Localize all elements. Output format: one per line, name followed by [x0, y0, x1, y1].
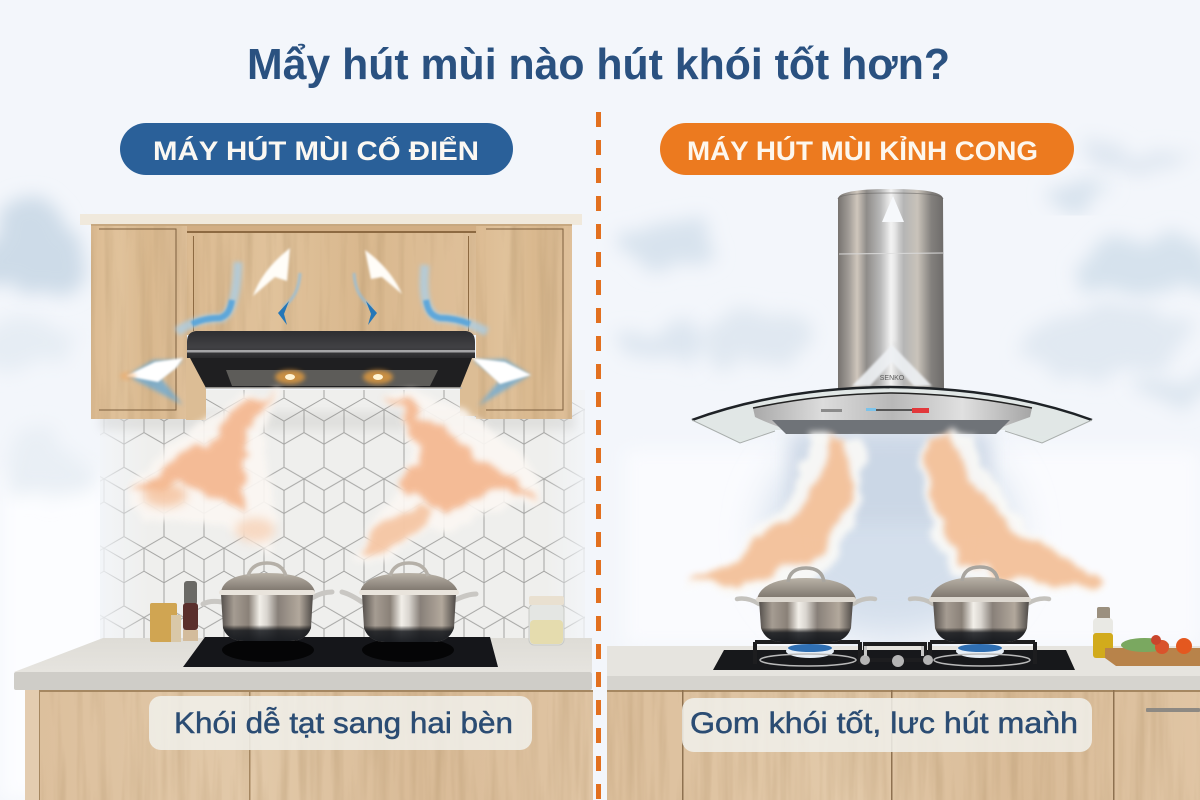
utensil block and bottle [150, 581, 198, 642]
airflow arrow in chimney [852, 196, 932, 386]
base cabinets [25, 690, 593, 800]
caption: curved glass hood [682, 698, 1092, 752]
caption: classic hood [149, 696, 532, 750]
panel: curved glass hood kitchen [607, 189, 1200, 800]
glass canopy [692, 387, 1092, 443]
spice jar [529, 596, 564, 645]
base cabinets [607, 690, 1200, 800]
stainless hood panel [753, 375, 1032, 434]
heading pill: curved glass hood [660, 123, 1074, 175]
panel: classic hood kitchen [14, 214, 593, 800]
slim range hood [187, 331, 475, 388]
brand text on chimney: SENKO [880, 375, 905, 382]
heading pill: curved glass hood: MÁY HÚT MÙI KỈNH CONG [687, 134, 1038, 166]
airflow arrows around hood [120, 248, 531, 406]
caption: curved glass hood: Gom khói tốt, lưc hút maǹh [690, 707, 1078, 740]
left pot 2 [342, 563, 476, 642]
countertop [607, 646, 1200, 690]
heading pill: classic hood [120, 123, 513, 175]
oil bottle [1093, 607, 1113, 658]
heading pill: classic hood: MÁY HÚT MÙI CỐ ĐIỂN [153, 134, 479, 166]
smoke right plume [355, 393, 541, 565]
center dashed divider [596, 112, 601, 800]
vegetable tray [1105, 635, 1200, 666]
caption: classic hood: Khói dễ tạt sang hai bèn [174, 707, 513, 740]
tile backsplash [100, 390, 585, 640]
wall cabinets [80, 214, 582, 420]
right pot 1 [737, 568, 875, 642]
left pot 1 [203, 563, 332, 641]
right pot 2 [910, 567, 1049, 642]
countertop [14, 638, 592, 690]
gas stove [713, 642, 1075, 670]
chimney hood body [838, 189, 944, 390]
smoke left plume [685, 435, 863, 592]
title: Mẩy hút mùi nào hút khói tốt hơn? [247, 40, 950, 89]
smoke right plume [923, 435, 1108, 590]
smoke left plume [130, 393, 275, 552]
induction cooktop [183, 637, 498, 667]
